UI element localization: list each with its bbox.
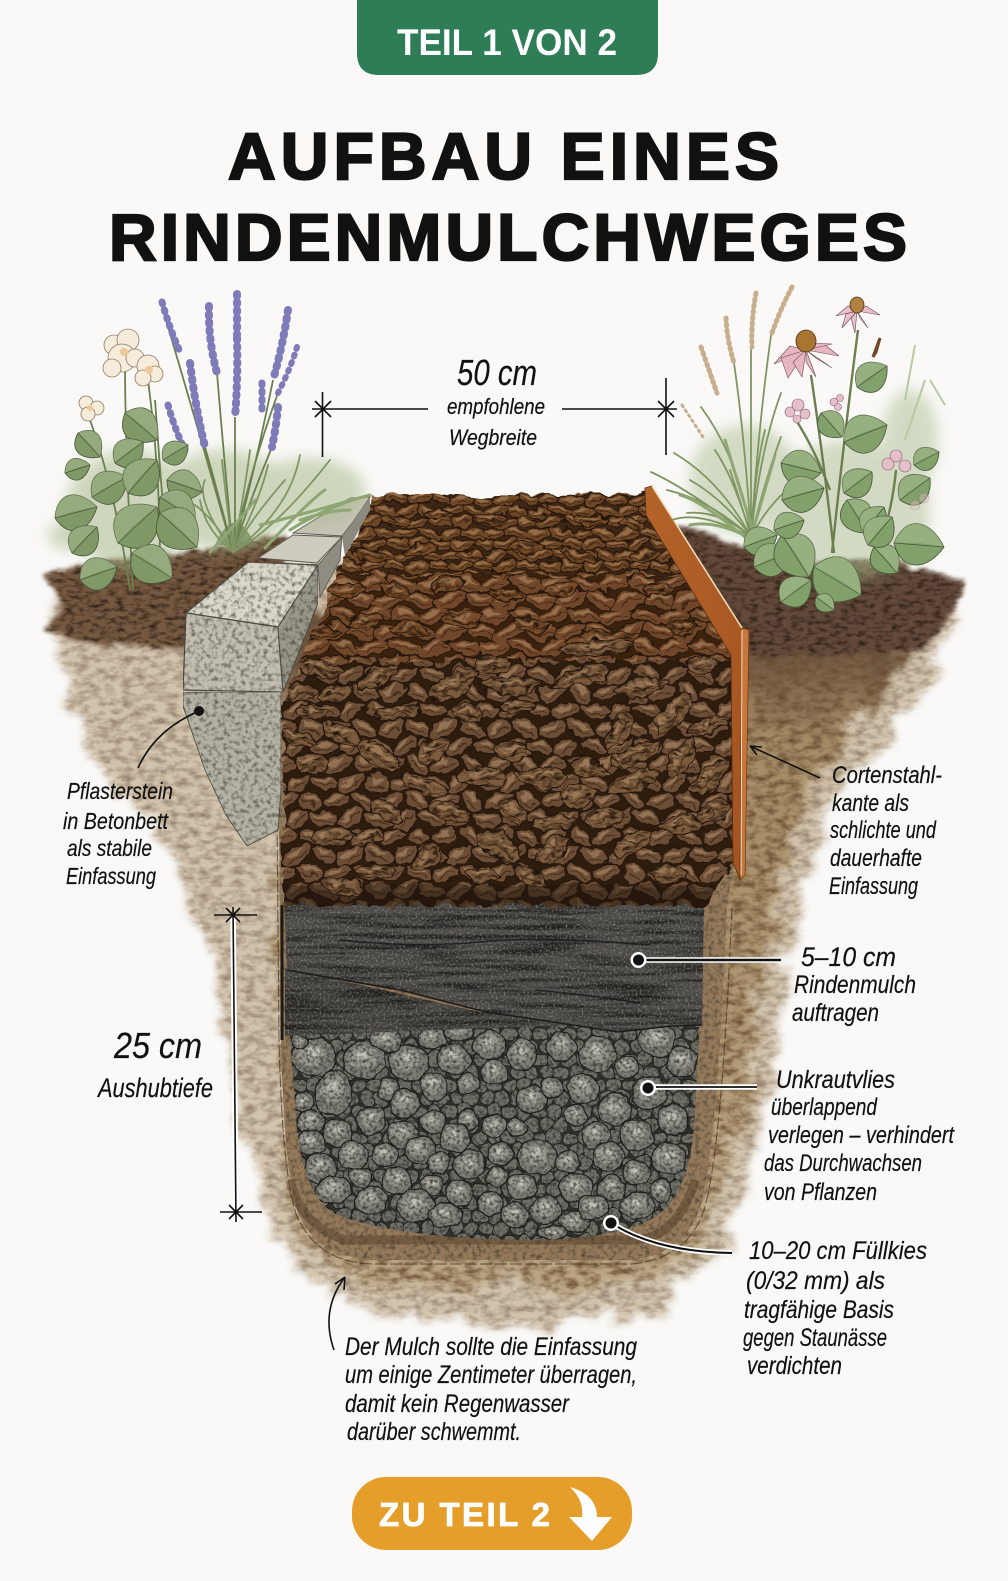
callout: weed fleece: verlegen – verhindert (768, 1122, 955, 1149)
concrete bed (183, 692, 281, 846)
plants right: grasses and coneflowers (651, 287, 946, 617)
front paver (183, 562, 318, 692)
callout: corten steel: schlichte und (830, 817, 936, 844)
gravel layer (290, 1025, 700, 1240)
callout: fill gravel: gegen Staunässe (743, 1324, 887, 1352)
soil body watercolor (48, 560, 955, 1325)
leaves (50, 400, 211, 595)
dimension: excavation depth 25 cm (96, 907, 262, 1222)
callout: paving stone: Pflasterstein (67, 778, 173, 804)
callout: weed fleece (640, 1066, 955, 1206)
corten steel edge (645, 486, 749, 880)
badge: Teil 1 von 2: TEIL 1 VON 2 (397, 22, 617, 63)
left ground surface (42, 535, 285, 650)
weed fleece layers (284, 900, 704, 1036)
second paver (258, 535, 342, 563)
callout: corten steel (750, 746, 942, 900)
lavender (160, 294, 370, 552)
white flowers (79, 329, 163, 421)
title (109, 119, 907, 274)
callout: paving stone: Einfassung (66, 863, 156, 889)
callout: corten steel: kante als (832, 790, 909, 817)
callout: weed fleece: von Pflanzen (764, 1179, 877, 1206)
stems (90, 360, 165, 590)
callout: weed fleece: das Durchwachsen (764, 1150, 922, 1177)
excavated pit walls (276, 690, 735, 1264)
callout: paving stone: als stabile (67, 835, 152, 861)
right ground surface (675, 525, 965, 655)
grass blades (651, 287, 800, 537)
callout: bark mulch: Rindenmulch (794, 971, 916, 999)
button: zu Teil 2: ZU TEIL 2 (379, 1496, 550, 1533)
leaves (739, 353, 946, 617)
note: mulch height with arrow (329, 1277, 637, 1446)
stone edging left (183, 497, 370, 846)
coneflower 1 (774, 330, 839, 378)
mulch chips (295, 506, 701, 654)
callout: bark mulch: 5–10 cm (801, 942, 896, 972)
callout: fill gravel: (0/32 mm) als (746, 1267, 885, 1295)
callout: corten steel: Einfassung (829, 873, 918, 900)
title: AUFBAU EINES (228, 119, 779, 193)
cross-section illustration (42, 287, 965, 1325)
callout: weed fleece: Unkrautvlies (776, 1066, 895, 1094)
icon: curved arrow down (569, 1487, 612, 1541)
third paver (293, 497, 370, 536)
note: mulch height with arrow: damit kein Regenwasser (345, 1390, 570, 1418)
callout: corten steel: Cortenstahl- (832, 762, 942, 789)
plants left: flowers and lavender (48, 294, 370, 595)
callout: bark mulch: auftragen (792, 999, 879, 1027)
callout: fill gravel: verdichten (747, 1352, 842, 1380)
note: mulch height with arrow: um einige Zentimeter überragen, (345, 1361, 637, 1389)
dimension: path width 50 cm: Wegbreite (449, 425, 537, 450)
callout: corten steel: dauerhafte (830, 845, 922, 872)
dimension: excavation depth 25 cm: 25 cm (113, 1025, 202, 1066)
note: mulch height with arrow: Der Mulch sollte die Einfassung (345, 1333, 637, 1361)
mulch layer (270, 480, 750, 915)
coneflower 2 (836, 297, 880, 357)
button: zu Teil 2 (352, 1477, 632, 1550)
callout: paving stone (63, 706, 204, 889)
foliage wash (690, 390, 938, 580)
pale sprigs (905, 345, 945, 440)
callout: fill gravel: tragfähige Basis (744, 1296, 894, 1324)
foliage wash (48, 450, 365, 570)
dimension: path width 50 cm (312, 352, 677, 457)
title: RINDENMULCHWEGES (109, 200, 907, 274)
dimension: path width 50 cm: 50 cm (457, 352, 537, 393)
callout: fill gravel: 10–20 cm Füllkies (749, 1237, 927, 1265)
dimension: path width 50 cm: empfohlene (447, 394, 545, 419)
note: mulch height with arrow: darüber schwemmt. (347, 1418, 521, 1446)
callout: paving stone: in Betonbett (63, 808, 169, 834)
badge: Teil 1 von 2 (357, 0, 658, 75)
callout: weed fleece: überlappend (771, 1094, 878, 1121)
stems (796, 330, 896, 560)
callout: bark mulch (630, 942, 916, 1027)
small pink flowers (785, 394, 929, 510)
dimension: excavation depth 25 cm: Aushubtiefe (96, 1073, 213, 1103)
callout: fill gravel (603, 1215, 927, 1380)
